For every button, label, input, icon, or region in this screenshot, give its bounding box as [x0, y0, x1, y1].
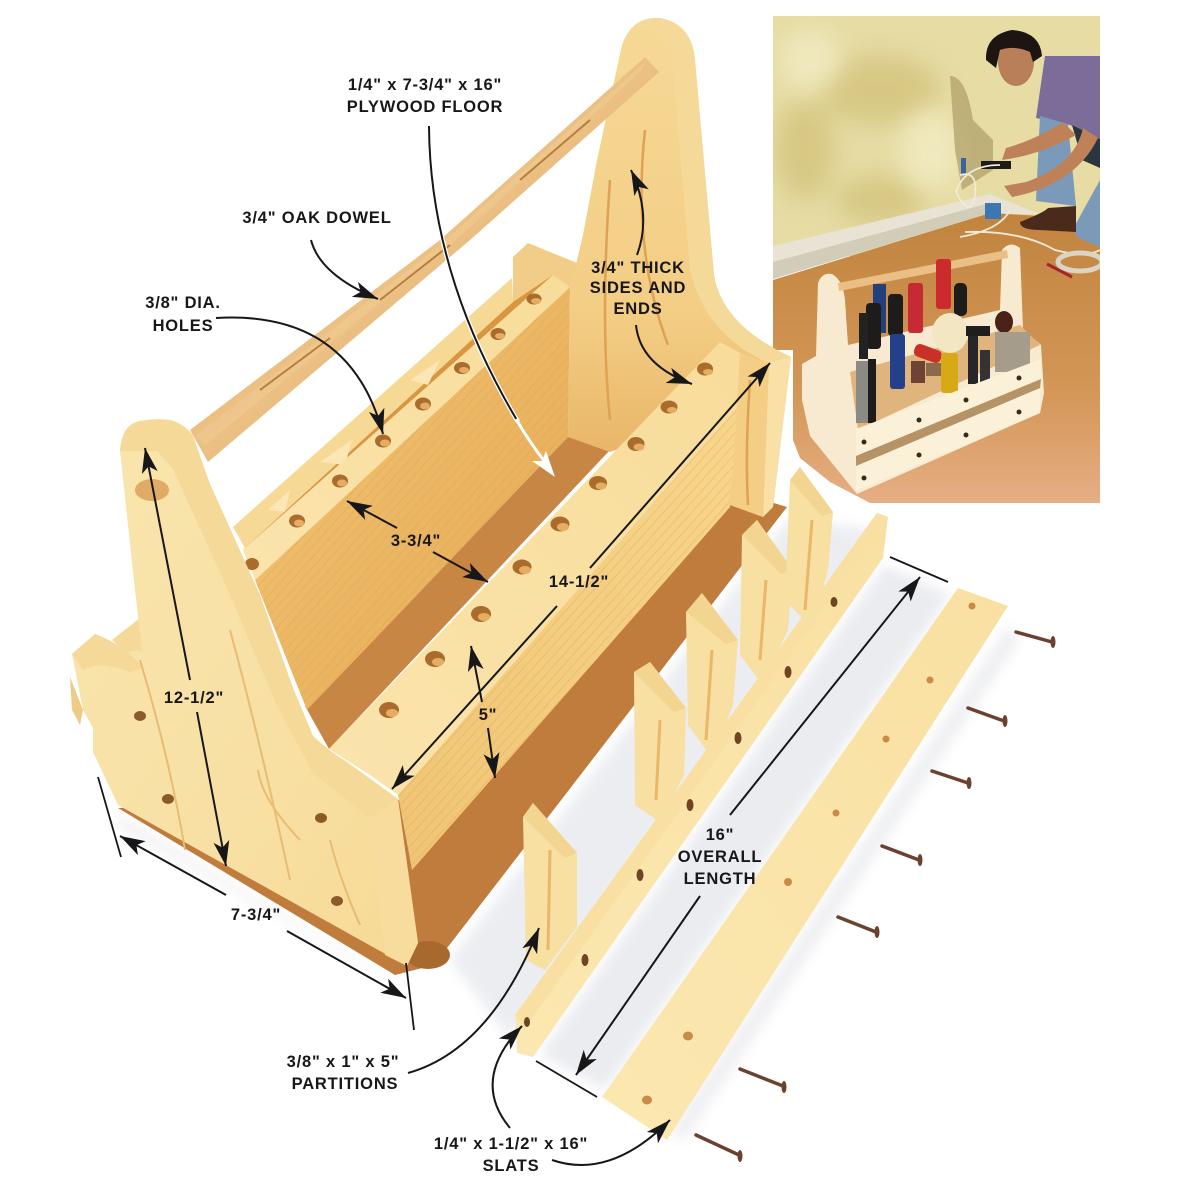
- label: holes: HOLES: [153, 317, 213, 335]
- front slat: [602, 588, 1008, 1140]
- dimension: 12-1/2: 12-1/2": [164, 689, 224, 707]
- label: partitions: [287, 928, 539, 1093]
- far end panel: [568, 18, 791, 517]
- label: plywood floor: PLYWOOD FLOOR: [347, 98, 503, 116]
- far slat strip: [233, 275, 553, 550]
- label: holes: 3/8" DIA.: [145, 294, 221, 312]
- dimension: 16 overall length: 16": [706, 826, 734, 844]
- screws: [696, 632, 1056, 1162]
- label: oak dowel: 3/4" OAK DOWEL: [242, 209, 392, 227]
- ground shadows: [115, 520, 1020, 1140]
- toolbox illustration: [70, 18, 791, 975]
- label: partitions: PARTITIONS: [292, 1075, 398, 1093]
- partition strip with partitions: [515, 467, 888, 1057]
- dimension: 3-3/4: 3-3/4": [391, 532, 441, 550]
- small screwdriver: [1047, 264, 1072, 277]
- dimension: 14-1/2: [392, 363, 770, 789]
- blue box: [985, 203, 1001, 219]
- dimension: 16 overall length: [536, 557, 948, 1097]
- dimension: 5: 5": [479, 706, 497, 724]
- plywood floor: [118, 437, 787, 975]
- dimension: 14-1/2: 14-1/2": [549, 573, 609, 591]
- label: sides and ends: [590, 170, 692, 384]
- cables: [956, 165, 1100, 254]
- label: oak dowel: [242, 209, 392, 299]
- label: slats: SLATS: [483, 1157, 539, 1175]
- baseboard: [773, 194, 1040, 279]
- photo cut-out corner: [760, 350, 870, 510]
- holes: left board: [245, 294, 542, 570]
- left inner board: [243, 275, 570, 710]
- strip holes: [524, 597, 838, 1027]
- label: plywood floor: 1/4" x 7-3/4" x 16": [348, 76, 502, 94]
- back slat stub behind near panel: [112, 618, 143, 660]
- partitions: [523, 467, 833, 970]
- dimension: 7-3/4: 7-3/4": [231, 906, 281, 924]
- wood floor: [773, 213, 1100, 503]
- label: slats: [434, 1026, 670, 1175]
- label: slats: 1/4" x 1-1/2" x 16": [434, 1135, 588, 1153]
- far low end stub: [513, 243, 577, 305]
- mini dowel: [838, 250, 1008, 291]
- tools: [856, 259, 1030, 423]
- dimension: 16 overall length: LENGTH: [684, 870, 756, 888]
- dimension: 16 overall length: OVERALL: [678, 848, 762, 866]
- wall: [773, 16, 1100, 256]
- label: holes: [145, 294, 383, 434]
- label: sides and ends: SIDES AND: [590, 279, 686, 297]
- dimension: 3-3/4: [347, 501, 488, 582]
- near end panel: [70, 419, 418, 966]
- outlet: [961, 158, 966, 174]
- cable coil: [1058, 253, 1102, 271]
- right long board: [329, 342, 740, 870]
- label: partitions: 3/8" x 1" x 5": [287, 1053, 399, 1071]
- end panel holes: [135, 479, 169, 501]
- label: sides and ends: ENDS: [613, 300, 663, 318]
- dowel handle: [190, 57, 659, 462]
- dimension: 5: [471, 646, 497, 778]
- inset photo: [773, 16, 1102, 503]
- label: plywood floor: [347, 76, 555, 477]
- label: sides and ends: 3/4" THICK: [591, 259, 685, 277]
- mini toolbox: [802, 244, 1044, 494]
- man: [981, 30, 1100, 247]
- mini slats: [858, 363, 1030, 430]
- holes: right board: [379, 362, 713, 718]
- dimension: 7-3/4: [98, 777, 414, 1030]
- wall shadow: [950, 76, 993, 190]
- dimension: 12-1/2: [145, 448, 226, 866]
